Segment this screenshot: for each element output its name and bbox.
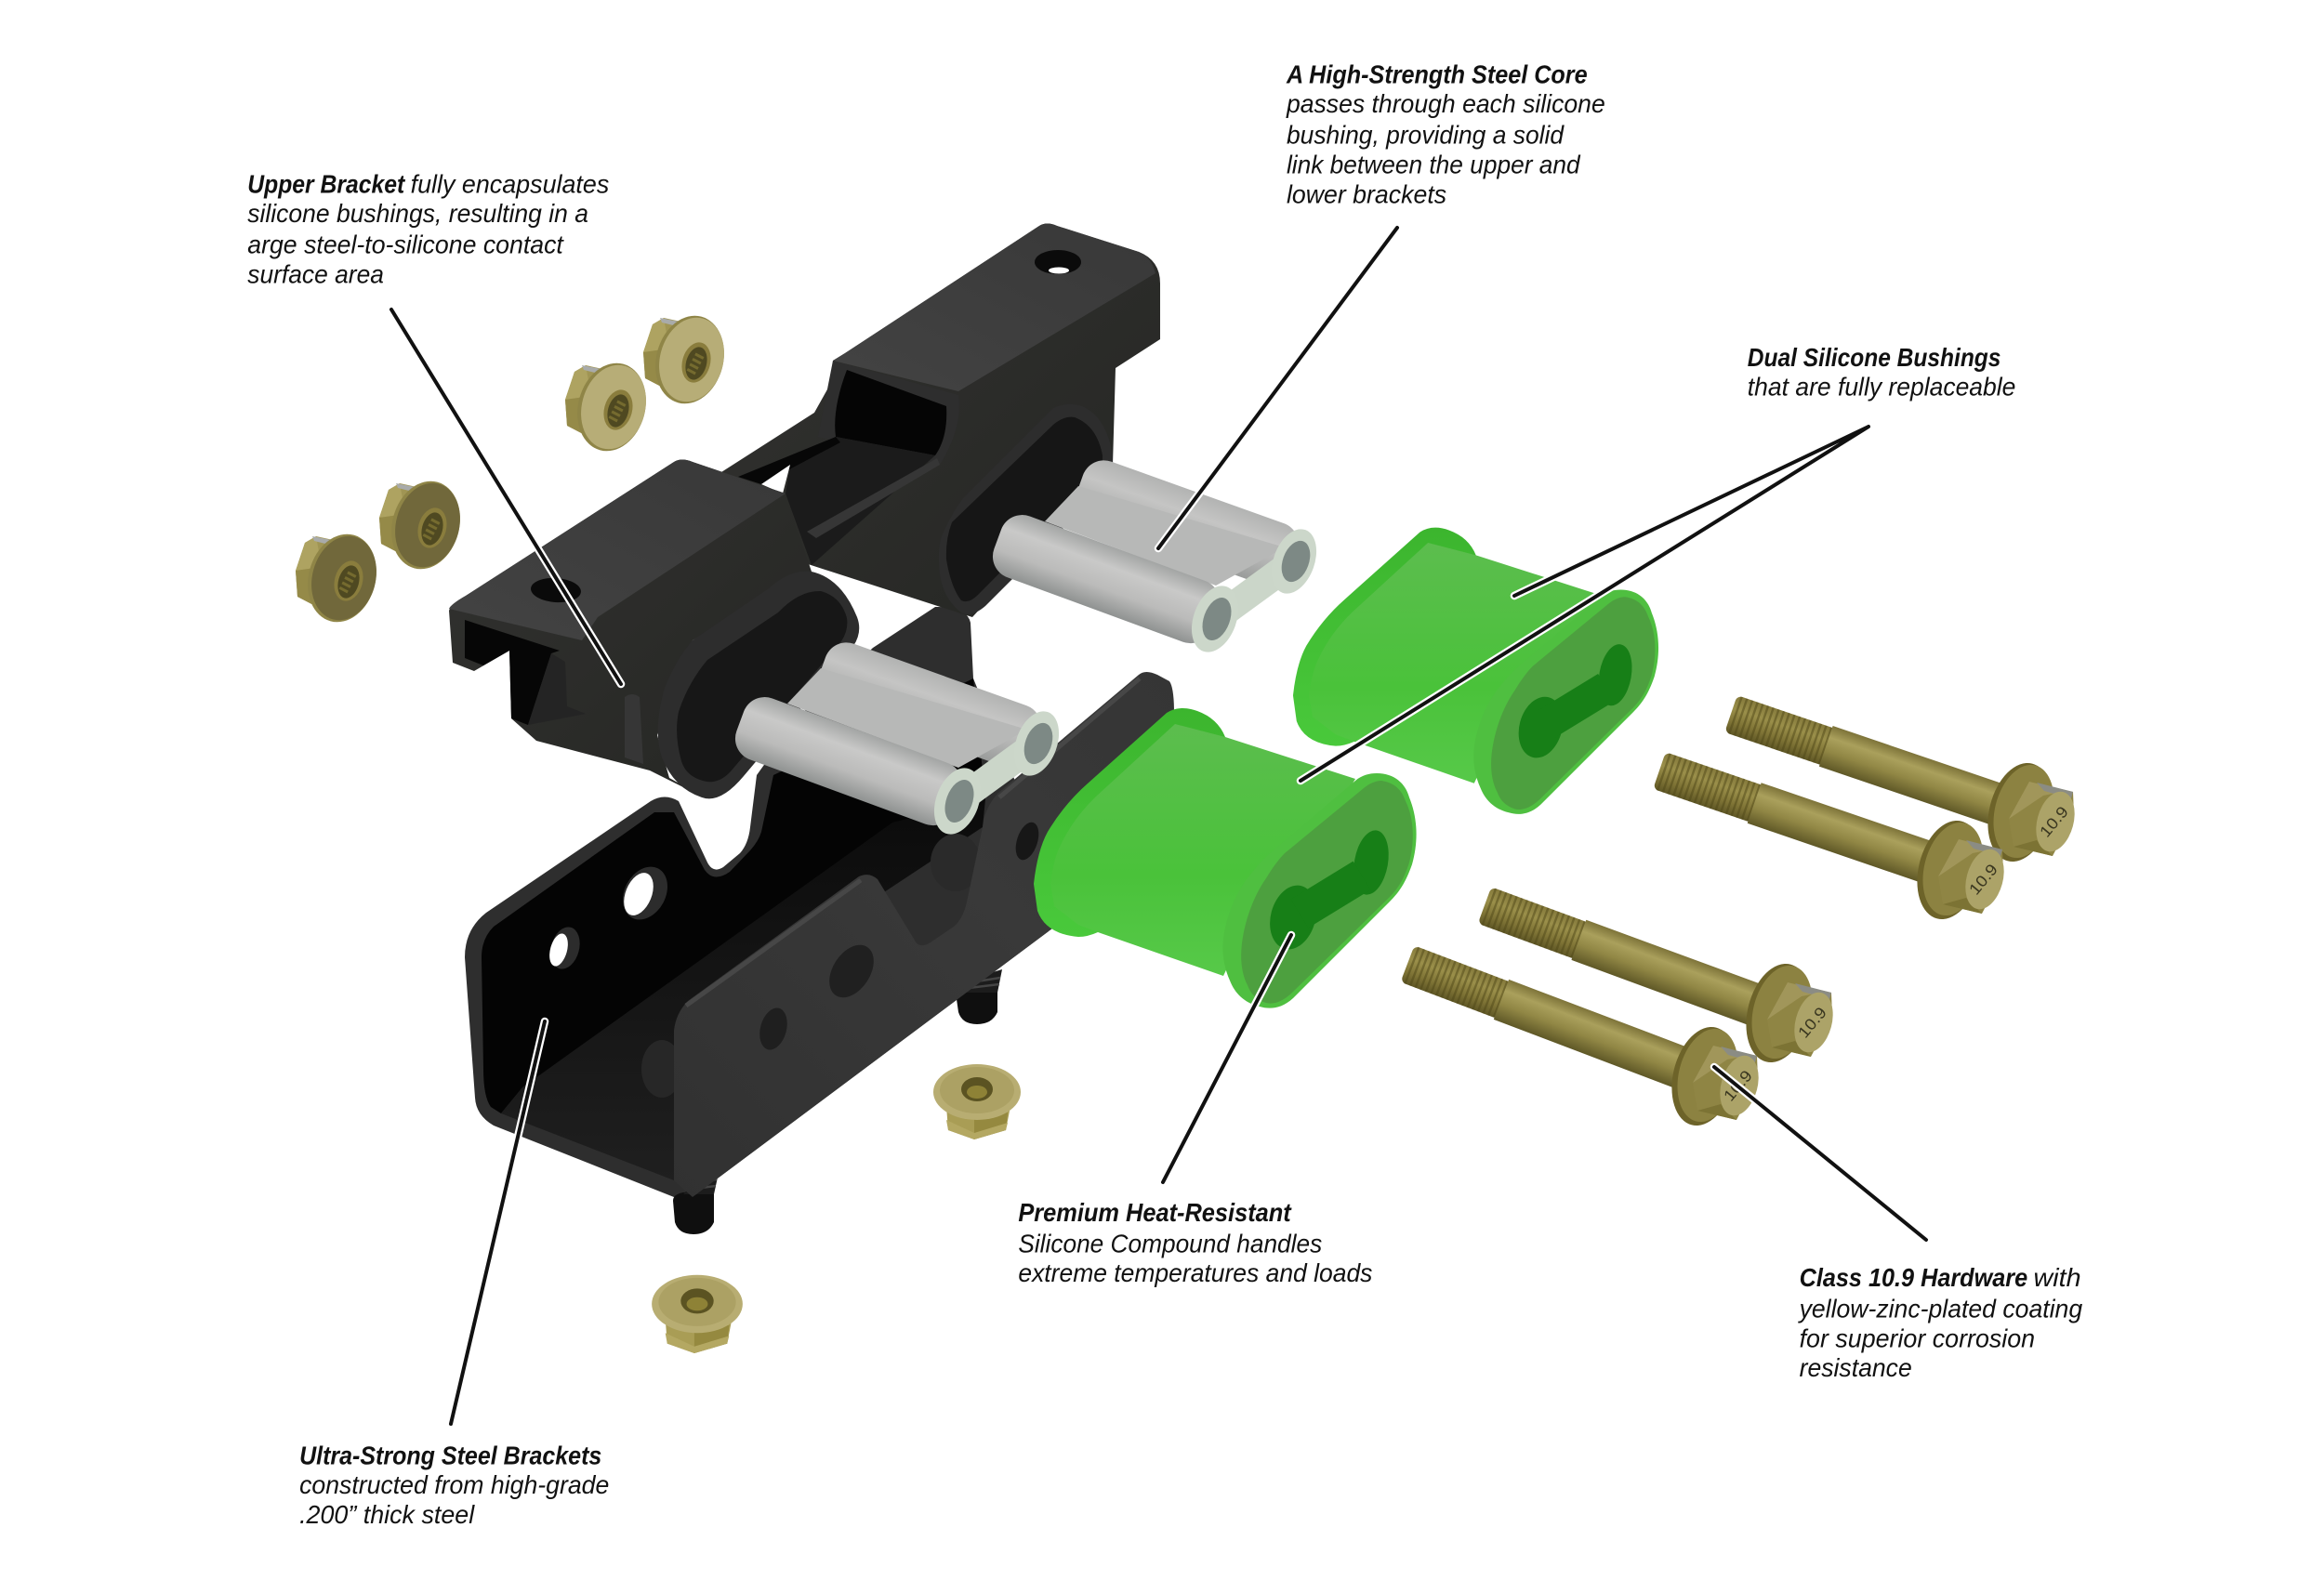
bolt D: 10.9: [1721, 1067, 1756, 1105]
bolt B: [1653, 750, 2010, 926]
callout: ultra-strong steel brackets: constructed from high-grade: [299, 1470, 609, 1499]
near wall of lower bracket: [674, 672, 1174, 1197]
callout: steel core: passes through each silicone: [1286, 89, 1605, 118]
bolt A: [1724, 693, 2080, 868]
callout: premium heat-resistant: Premium Heat-Resistant: [1018, 1198, 1292, 1227]
leader: steel core: [1158, 228, 1397, 548]
callout: upper bracket: [247, 169, 609, 289]
near wall hole large: [820, 937, 883, 1006]
flange nut 2: [379, 473, 469, 577]
callout: steel core: link between the upper and: [1287, 151, 1581, 179]
rear upper block: [721, 223, 1160, 617]
leader: dual bushings: [1301, 427, 1868, 781]
callout: ultra-strong steel brackets: [299, 1441, 609, 1529]
callout: class 10.9 hardware: with: [2034, 1263, 2081, 1292]
leader: upper bracket: [391, 309, 621, 684]
lower steel bracket: [465, 607, 1174, 1234]
bolt D: [1400, 943, 1764, 1132]
top hole: [530, 576, 582, 604]
small bracket slot: [1011, 820, 1043, 862]
rear lower inner panel: [786, 437, 935, 565]
front bushing pocket: [658, 572, 859, 798]
flange nut 1: [296, 526, 386, 630]
callout: upper bracket: fully encapsulates: [411, 169, 609, 198]
far wall of lower bracket: [465, 607, 1049, 1197]
rear top face: [833, 223, 1155, 391]
flange nut 5: [933, 1064, 1021, 1139]
leader: class 10.9 hardware: [1714, 1067, 1926, 1240]
rear end opening: [835, 370, 946, 455]
bolt B: 10.9: [1966, 861, 2001, 899]
callout: upper bracket: silicone bushings, resulting in a: [247, 199, 588, 228]
front end opening: [465, 620, 560, 725]
callout: dual silicone bushings: [1748, 343, 2015, 402]
threaded stud rear: [957, 969, 1002, 1024]
callout: premium heat-resistant: extreme temperatures and loads: [1018, 1258, 1372, 1287]
top mounting hole: [1035, 250, 1081, 274]
callout: steel core: [1286, 59, 1605, 208]
far wall large hole: [614, 859, 677, 928]
callout: class 10.9 hardware: for superior corrosion: [1800, 1323, 2035, 1352]
callout: ultra-strong steel brackets: Ultra-Strong Steel Brackets: [299, 1441, 601, 1469]
callout: class 10.9 hardware: yellow-zinc-plated coating: [1798, 1294, 2083, 1323]
flange nut 4: [643, 308, 733, 412]
callout: upper bracket: arge steel-to-silicone contact: [247, 230, 564, 259]
inner black face: [482, 678, 985, 1113]
front upper block: [449, 459, 812, 799]
front top face: [449, 459, 786, 640]
tongue groove: [625, 694, 643, 764]
leader: heat-resistant compound: [1163, 935, 1291, 1182]
callout: dual silicone bushings: Dual Silicone Bushings: [1748, 343, 2000, 372]
callout: class 10.9 hardware: [1798, 1263, 2083, 1382]
rear rim of opening: [818, 361, 959, 465]
callout: steel core: bushing, providing a solid: [1287, 121, 1565, 150]
callout: premium heat-resistant: [1018, 1198, 1372, 1287]
callout: class 10.9 hardware: Class 10.9 Hardware: [1800, 1263, 2027, 1292]
bolt A: 10.9: [2037, 803, 2072, 841]
channel floor: [501, 799, 985, 1180]
callout: upper bracket: surface area: [247, 260, 384, 289]
callout: dual silicone bushings: that are fully replaceable: [1748, 373, 2015, 402]
threaded stud front: [673, 1173, 719, 1234]
steel core rear: [986, 454, 1325, 659]
far wall small hole: [547, 924, 584, 972]
callout: premium heat-resistant: Silicone Compound handles: [1018, 1229, 1322, 1257]
silicone bushing rear: [1293, 528, 1658, 814]
opening inner wall: [528, 653, 586, 725]
flange nut 6: [652, 1275, 743, 1353]
callout: class 10.9 hardware: resistance: [1800, 1353, 1912, 1382]
upper steel bracket: [449, 223, 1160, 799]
near wall hole small: [756, 1005, 791, 1053]
callout: upper bracket: Upper Bracket: [247, 169, 406, 198]
rivet head inside channel: [641, 1040, 682, 1098]
near wall top highlight: [686, 678, 1140, 1006]
bolt C: 10.9: [1795, 1004, 1830, 1042]
bolt C: [1477, 885, 1839, 1069]
connecting strap: [738, 437, 940, 538]
steel core front: [729, 637, 1067, 841]
rivet head inside channel rear: [931, 834, 981, 891]
callout: steel core: A High-Strength Steel Core: [1286, 59, 1588, 88]
silicone bushing front: [1034, 708, 1417, 1008]
flange nut 3: [565, 355, 655, 459]
rear bushing pocket: [939, 404, 1113, 614]
callout: steel core: lower brackets: [1287, 179, 1446, 208]
leader: steel brackets: [451, 1021, 545, 1424]
callout: ultra-strong steel brackets: .200” thick steel: [299, 1500, 475, 1529]
